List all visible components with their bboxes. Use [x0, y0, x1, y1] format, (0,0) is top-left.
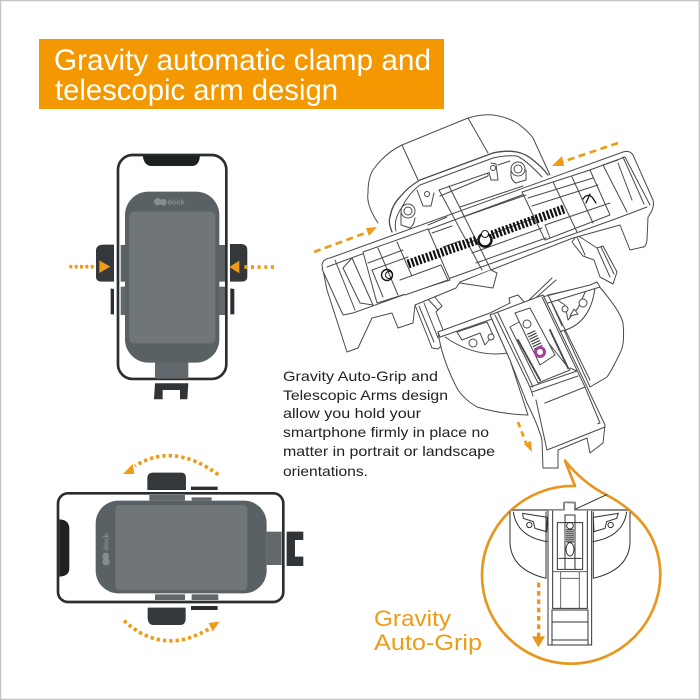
telescopic arm — [322, 151, 653, 352]
landscape phone mount — [58, 456, 303, 641]
arrow: rotate bottom — [124, 621, 220, 641]
top bar — [438, 282, 600, 337]
description text: smartphone firmly in place no — [283, 425, 489, 440]
right slider and wing — [572, 235, 617, 284]
arrow: grip down — [532, 583, 545, 647]
arrow: grip down — [518, 422, 532, 452]
description text — [283, 369, 495, 479]
phone outline — [118, 155, 226, 379]
description text: matter in portrait or landscape — [283, 444, 495, 459]
arrow: arm right inward — [552, 143, 618, 166]
description text: Telescopic Arms design — [283, 388, 448, 403]
callout: gravity grip detail — [482, 461, 660, 664]
lower right shell — [548, 284, 624, 387]
arrow: squeeze from right — [229, 261, 274, 273]
brand logo — [154, 198, 185, 207]
exploded line drawing of clamp — [322, 115, 653, 468]
brand logo: dock — [101, 533, 110, 551]
arrow: squeeze from left — [69, 260, 110, 273]
gravity auto-grip label — [374, 606, 482, 655]
spring — [408, 209, 564, 264]
phone outline — [58, 493, 283, 602]
gravity auto-grip label: Auto-Grip — [374, 630, 482, 655]
bottom stem and foot — [154, 357, 188, 399]
left slider behind arm — [413, 291, 447, 349]
lower assembly — [438, 282, 624, 468]
portrait phone mount — [69, 155, 274, 399]
title banner — [39, 39, 444, 109]
mesh pad — [115, 505, 247, 590]
holder plate — [96, 501, 267, 593]
arrow: rotate top — [123, 456, 218, 475]
title banner: Gravity automatic clamp and — [54, 44, 431, 77]
arrow: arm left inward — [314, 227, 377, 252]
phone notch — [59, 519, 69, 577]
brand logo: dock — [167, 198, 185, 207]
brand logo — [101, 533, 110, 565]
callout bubble — [482, 461, 660, 664]
description text: allow you hold your — [283, 406, 422, 421]
pin left — [382, 270, 392, 280]
phone notch — [143, 155, 200, 166]
upper shell — [368, 115, 550, 232]
clamps and feet — [147, 473, 303, 625]
spring centre hub — [478, 230, 492, 246]
gravity auto-grip label: Gravity — [374, 606, 451, 631]
purple pin — [536, 348, 544, 356]
mesh pad — [129, 212, 215, 343]
callout coil — [558, 529, 582, 543]
clamp front view — [510, 502, 630, 645]
pin right — [583, 194, 596, 203]
sliding arm — [490, 295, 605, 468]
lower left shell — [438, 315, 528, 415]
clamp arms — [96, 244, 247, 315]
description text: orientations. — [283, 464, 368, 479]
description text: Gravity Auto-Grip and — [283, 369, 438, 384]
title banner: telescopic arm design — [55, 74, 338, 107]
holder plate — [125, 192, 219, 363]
coil — [531, 332, 540, 351]
